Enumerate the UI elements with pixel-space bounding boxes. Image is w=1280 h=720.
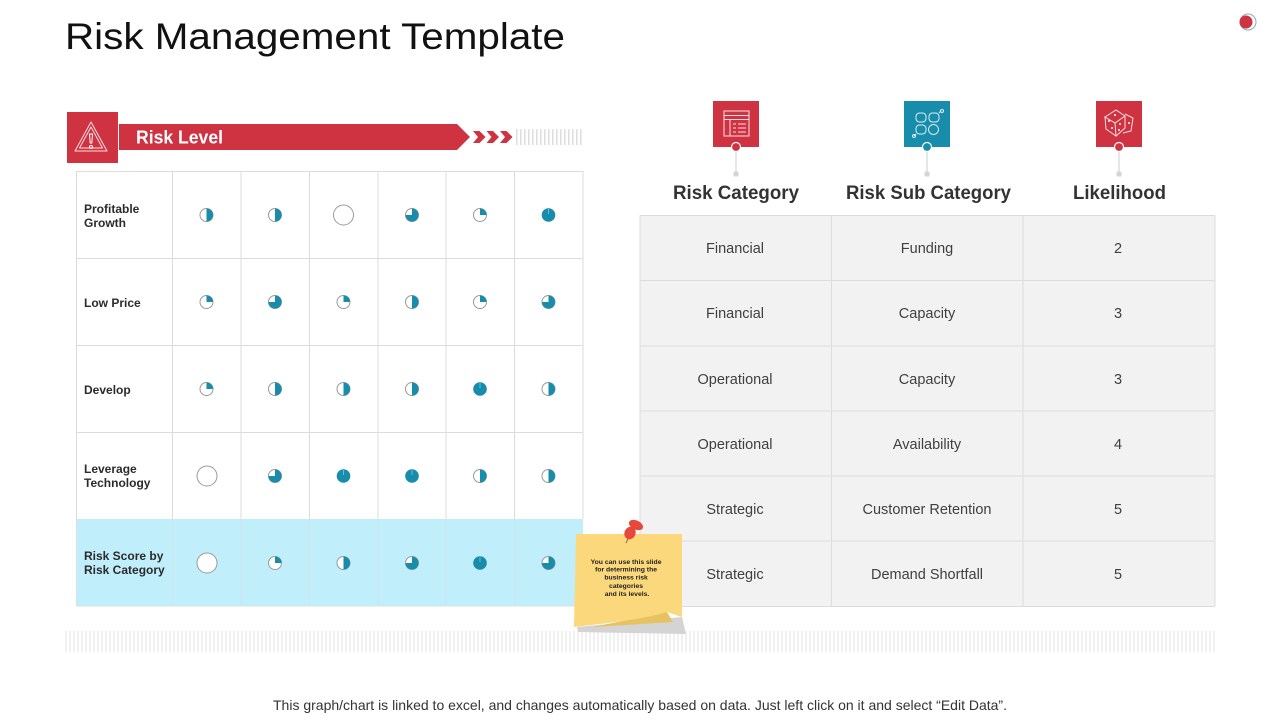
table row 4: Availability (893, 437, 962, 453)
table row 4: Operational (698, 437, 772, 453)
row label: Leverage Technology: Leverage (84, 462, 137, 476)
panel: risk level header (67, 112, 582, 163)
risk level banner (119, 124, 470, 150)
panel: risk data table (640, 216, 1215, 606)
callout: sticky note: for determining the (595, 566, 657, 574)
icon: push pin (622, 518, 645, 543)
icon: warning triangle (67, 112, 118, 163)
table row 6: Demand Shortfall (871, 567, 983, 583)
table row 3: 3 (1114, 372, 1122, 388)
icon: top-right status dot (1240, 14, 1256, 30)
row 2 score icons (200, 296, 555, 308)
table row 3 (698, 372, 1122, 388)
callout: sticky note: business risk (604, 574, 648, 582)
row label: Leverage Technology: Technology (84, 476, 151, 490)
heading: Risk Sub Category: Risk Sub Category (846, 182, 1011, 204)
table row 1: Funding (901, 241, 953, 257)
table row 5: Strategic (706, 502, 764, 518)
table row 1: 2 (1114, 241, 1122, 257)
panel: column headers (673, 101, 1166, 204)
heading: Risk Category: Risk Category (673, 182, 799, 204)
row 4 score icons (197, 466, 555, 486)
title: Risk Management Template (65, 15, 565, 57)
table row 3: Capacity (899, 372, 956, 388)
callout: sticky note (574, 518, 686, 634)
row label: Profitable Growth: Profitable (84, 202, 140, 216)
heading: Likelihood: Likelihood (1073, 182, 1166, 204)
row label: Risk Score by Risk Category: Risk Category (84, 563, 165, 577)
row label: Risk Score by Risk Category: Risk Score by (84, 549, 164, 563)
panel: risk level matrix (76, 171, 583, 606)
table row 6 (706, 567, 1122, 583)
row 5 score icons (197, 553, 555, 573)
table row 2: Capacity (899, 306, 956, 322)
callout: sticky note: and its levels. (605, 591, 649, 598)
table row 4 (698, 437, 1122, 453)
table row 1 (706, 241, 1122, 257)
table row 2: Financial (706, 306, 764, 322)
callout: sticky note: categories (609, 583, 643, 590)
table row 2 (706, 306, 1122, 322)
table row 5 (706, 502, 1122, 518)
table row 6: Strategic (706, 567, 764, 583)
table row 2: 3 (1114, 306, 1122, 322)
row 3 score icons (200, 382, 555, 396)
row label: Develop: Develop (84, 383, 131, 397)
row label: Low Price: Low Price (84, 296, 141, 310)
row label: Profitable Growth: Growth (84, 216, 126, 230)
icon: risk category (713, 101, 759, 176)
decorative stripe band (65, 631, 1215, 652)
icon: likelihood dice (1096, 101, 1142, 176)
table row 1: Financial (706, 241, 764, 257)
row 1 score icons (200, 205, 555, 225)
icon: risk sub category (904, 101, 950, 176)
footer note: This graph/chart is linked to excel, and changes automatically based on data. Just left click on it and select “Edit Data”. (273, 697, 1007, 713)
table row 5: Customer Retention (863, 502, 991, 518)
arrow chevrons (473, 131, 512, 143)
table row 3: Operational (698, 372, 772, 388)
callout: sticky note: You can use this slide (591, 559, 662, 566)
table row 5: 5 (1114, 502, 1122, 518)
risk level banner: Risk Level (136, 126, 223, 148)
table row 4: 4 (1114, 437, 1122, 453)
table row 6: 5 (1114, 567, 1122, 583)
